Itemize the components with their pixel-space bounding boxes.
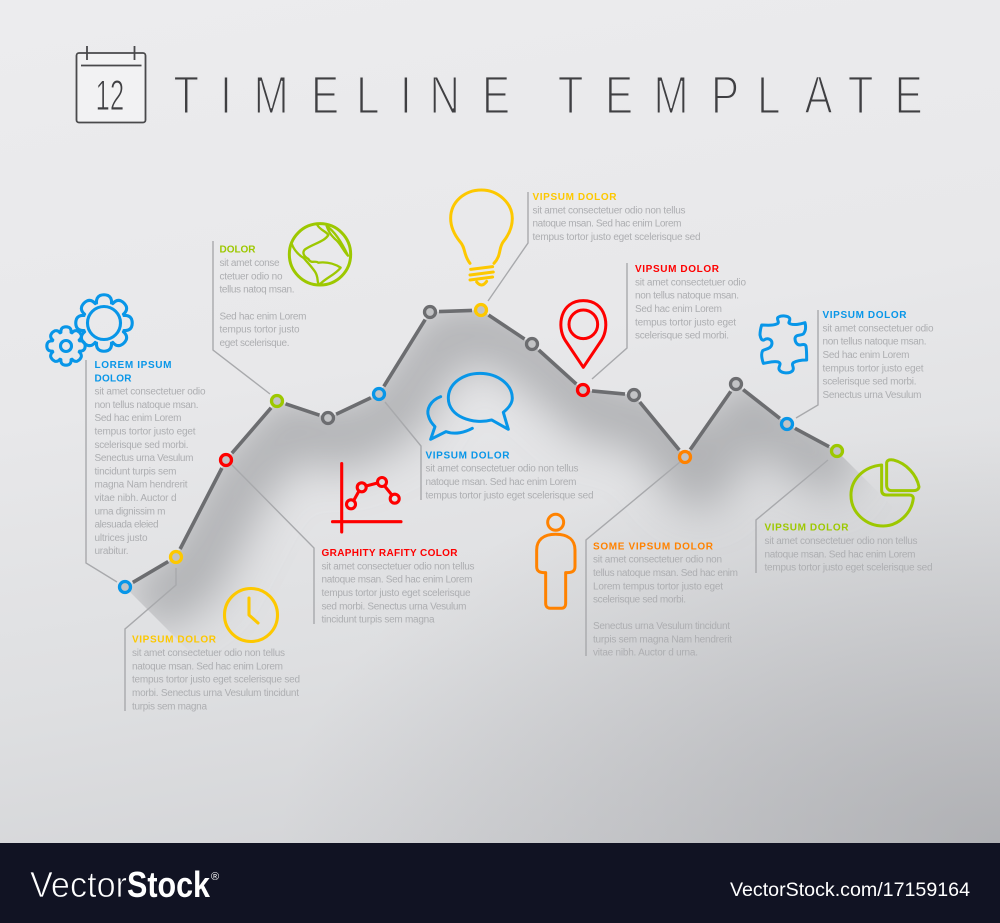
timeline area shadow <box>139 332 851 609</box>
text block: vipsum dolor green right <box>764 523 932 574</box>
text block: vipsum dolor yellow bottom: turpis sem magna <box>132 701 207 712</box>
text block: vipsum dolor blue right: Senectus urna Vesulum <box>822 390 922 401</box>
text block: lorem ipsum dolor: Senectus urna Vesulum <box>94 453 194 464</box>
text block: vipsum dolor yellow top: VIPSUM DOLOR <box>532 192 617 203</box>
text block: vipsum dolor red: tempus tortor justo eget <box>635 317 736 328</box>
text block: some vipsum dolor: turpis sem magna Nam hendrerit <box>593 634 732 645</box>
text block: lorem ipsum dolor: tincidunt turpis sem <box>94 466 176 477</box>
text block: dolor: tellus natoq msan. <box>220 285 294 296</box>
footer bar <box>0 843 1000 923</box>
text block: vipsum dolor blue right: Sed hac enim Lorem <box>822 350 910 361</box>
text block: graphity rafity color: tempus tortor justo eget scelerisque <box>322 588 471 599</box>
icon: light bulb <box>451 190 512 285</box>
text block: lorem ipsum dolor: urabitur. <box>94 546 128 557</box>
text block: vipsum dolor red: non tellus natoque msan. <box>635 291 739 302</box>
text block: vipsum dolor red: VIPSUM DOLOR <box>635 264 720 275</box>
text block: some vipsum dolor: scelerisque sed morbi. <box>593 595 686 606</box>
text block: vipsum dolor green right: VIPSUM DOLOR <box>764 523 849 534</box>
text block: vipsum dolor blue right: non tellus natoque msan. <box>822 337 926 348</box>
footer bar: ® <box>211 871 219 883</box>
text block: dolor: ctetuer odio no <box>220 271 283 282</box>
text block: graphity rafity color: sed morbi. Senectus urna Vesulum <box>322 601 466 612</box>
text block: lorem ipsum dolor: LOREM IPSUM <box>94 360 172 371</box>
text block: graphity rafity color: tincidunt turpis sem magna <box>322 615 435 626</box>
timeline nodes <box>120 304 842 592</box>
text block: lorem ipsum dolor: vitae nibh. Auctor d <box>94 493 176 504</box>
footer bar: VectorStock.com/17159164 <box>730 879 970 901</box>
text block: some vipsum dolor: vitae nibh. Auctor d urna. <box>593 648 698 659</box>
text block: dolor: tempus tortor justo <box>220 325 300 336</box>
text block: vipsum dolor green right: natoque msan. Sed hac enim Lorem <box>764 549 916 560</box>
text block: dolor <box>220 244 306 349</box>
text block: graphity rafity color: sit amet consectetuer odio non tellus <box>322 561 474 572</box>
text block: vipsum dolor blue right <box>822 310 934 401</box>
text block: lorem ipsum dolor: tempus tortor justo eget <box>94 426 196 438</box>
text block: vipsum dolor blue centre: natoque msan. Sed hac enim Lorem <box>426 477 576 488</box>
footer bar: Stock <box>127 864 211 905</box>
icon: person <box>537 514 575 608</box>
text block: vipsum dolor yellow top: sit amet consectetuer odio non tellus <box>532 205 686 216</box>
text block: some vipsum dolor: SOME VIPSUM DOLOR <box>593 541 714 552</box>
icon: globe <box>289 224 351 285</box>
text block: vipsum dolor yellow bottom <box>132 635 300 712</box>
text block: vipsum dolor red: Sed hac enim Lorem <box>635 304 722 315</box>
text block: lorem ipsum dolor: scelerisque sed morbi. <box>94 440 188 451</box>
text block: vipsum dolor green right: sit amet consectetuer odio non tellus <box>764 536 918 547</box>
text block: vipsum dolor green right: tempus tortor justo eget scelerisque sed <box>764 563 932 574</box>
text block: lorem ipsum dolor: non tellus natoque msan. <box>94 400 198 411</box>
text block: vipsum dolor yellow top: natoque msan. Sed hac enim Lorem <box>532 219 682 230</box>
text block: vipsum dolor yellow bottom: VIPSUM DOLOR <box>132 635 217 646</box>
icon: puzzle piece <box>760 316 807 373</box>
text block: vipsum dolor yellow top: tempus tortor justo eget scelerisque sed <box>532 232 700 243</box>
text block: vipsum dolor blue right: tempus tortor justo eget <box>822 363 924 374</box>
text block: dolor: eget scelerisque. <box>220 338 290 349</box>
text block: vipsum dolor blue right: VIPSUM DOLOR <box>822 310 907 321</box>
text block: lorem ipsum dolor: magna Nam hendrerit <box>94 480 188 491</box>
text block: vipsum dolor red: scelerisque sed morbi. <box>635 331 729 342</box>
text block: vipsum dolor yellow bottom: morbi. Senectus urna Vesulum tincidunt <box>132 688 299 699</box>
text block: vipsum dolor yellow bottom: sit amet consectetuer odio non tellus <box>132 648 285 659</box>
text block: dolor: Sed hac enim Lorem <box>220 311 306 322</box>
text block: graphity rafity color: natoque msan. Sed hac enim Lorem <box>322 575 472 586</box>
icon: speech bubbles <box>428 373 512 439</box>
calendar icon <box>76 46 146 122</box>
text block: some vipsum dolor: Senectus urna Vesulum tincidunt <box>593 621 730 632</box>
icon: gears <box>47 295 132 365</box>
text block: some vipsum dolor <box>593 541 738 659</box>
text block: lorem ipsum dolor: sit amet consectetuer odio <box>94 387 206 398</box>
text block: vipsum dolor yellow bottom: tempus tortor justo eget scelerisque sed <box>132 675 300 686</box>
text block: lorem ipsum dolor: Sed hac enim Lorem <box>94 413 182 424</box>
text block: some vipsum dolor: Lorem tempus tortor justo eget <box>593 581 723 592</box>
footer bar: Vector <box>30 864 127 905</box>
text block: lorem ipsum dolor: alesuada eleied <box>94 520 158 531</box>
text block: vipsum dolor yellow bottom: natoque msan. Sed hac enim Lorem <box>132 661 283 672</box>
text block: vipsum dolor yellow top <box>532 192 700 243</box>
text block: graphity rafity color: GRAPHITY RAFITY COLOR <box>322 548 458 559</box>
text block: lorem ipsum dolor: ultrices justo <box>94 533 148 544</box>
text block: lorem ipsum dolor: urna dignissim m <box>94 506 166 517</box>
text block: vipsum dolor red <box>635 264 746 342</box>
text block: dolor: sit amet conse <box>220 258 280 269</box>
icon: pie chart <box>851 460 919 526</box>
text block: vipsum dolor blue centre: tempus tortor justo eget scelerisque sed <box>426 490 594 501</box>
text block: graphity rafity color <box>322 548 474 626</box>
text block: vipsum dolor blue centre <box>426 450 594 501</box>
title: TIMELINE TEMPLATE <box>173 66 923 126</box>
text block: dolor: DOLOR <box>220 244 256 256</box>
text block: vipsum dolor blue centre: sit amet consectetuer odio non tellus <box>426 464 578 475</box>
timeline line segments <box>133 310 829 582</box>
icon: clock <box>224 588 278 642</box>
text block: vipsum dolor blue right: sit amet consectetuer odio <box>822 323 934 334</box>
text block: vipsum dolor blue centre: VIPSUM DOLOR <box>426 450 510 461</box>
text block: some vipsum dolor: tellus natoque msan. Sed hac enim <box>593 568 738 579</box>
text block: lorem ipsum dolor <box>94 360 206 557</box>
text block: some vipsum dolor: sit amet consectetuer odio non <box>593 555 722 566</box>
text block: vipsum dolor blue right: scelerisque sed morbi. <box>822 377 916 388</box>
leader lines <box>86 192 828 711</box>
icon: map pin <box>561 301 606 367</box>
text block: vipsum dolor red: sit amet consectetuer odio <box>635 277 746 288</box>
text block: lorem ipsum dolor: DOLOR <box>94 373 132 384</box>
icon: line chart <box>332 464 401 532</box>
calendar icon: 12 <box>96 71 124 120</box>
